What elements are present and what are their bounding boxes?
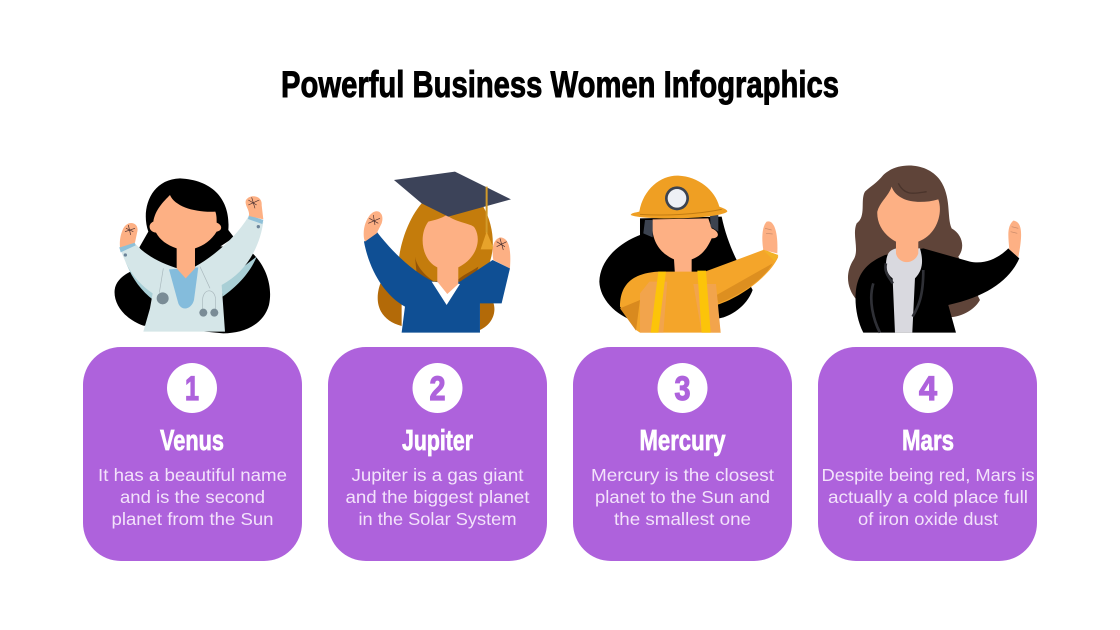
- illustration: business woman: [848, 166, 1021, 333]
- number badge 1: 1: [185, 370, 199, 408]
- heading: Jupiter: Jupiter: [402, 425, 473, 457]
- illustration: miner: [599, 176, 778, 333]
- number badge 1: [167, 363, 217, 413]
- text: Mercury description: [591, 465, 774, 529]
- heading: Venus: Venus: [160, 425, 224, 457]
- text: Mercury description: Mercury is the closest: [591, 465, 774, 485]
- card 1: Venus: [83, 347, 302, 561]
- text: Mars description: actually a cold place full: [828, 487, 1028, 507]
- number badge 4: [903, 363, 953, 413]
- text: Jupiter description: and the biggest planet: [346, 487, 530, 507]
- card 3: Mercury: [573, 347, 792, 561]
- title: Powerful Business Women Infographics: [281, 64, 839, 105]
- text: Venus description: and is the second: [120, 487, 265, 507]
- text: Venus description: planet from the Sun: [112, 509, 274, 529]
- heading: Mars: Mars: [902, 425, 954, 457]
- card 2: Jupiter: [328, 347, 547, 561]
- text: Mars description: Despite being red, Mars is: [822, 465, 1035, 485]
- illustration: doctor: [115, 178, 270, 333]
- text: Venus description: [98, 465, 287, 529]
- text: Venus description: It has a beautiful name: [98, 465, 287, 485]
- number badge 2: 2: [430, 370, 446, 408]
- text: Jupiter description: Jupiter is a gas giant: [352, 465, 524, 485]
- number badge 3: 3: [674, 370, 690, 408]
- illustration: graduate: [364, 172, 511, 333]
- number badge 2: [412, 363, 462, 413]
- text: Mars description: [822, 465, 1035, 529]
- text: Mercury description: the smallest one: [614, 509, 751, 529]
- text: Mercury description: planet to the Sun and: [595, 487, 770, 507]
- number badge 3: [658, 363, 708, 413]
- card 4: Mars: [818, 347, 1037, 561]
- text: Jupiter description: [346, 465, 530, 529]
- text: Mars description: of iron oxide dust: [858, 509, 998, 529]
- text: Jupiter description: in the Solar System: [358, 509, 516, 529]
- number badge 4: 4: [919, 370, 937, 408]
- heading: Mercury: Mercury: [640, 425, 726, 457]
